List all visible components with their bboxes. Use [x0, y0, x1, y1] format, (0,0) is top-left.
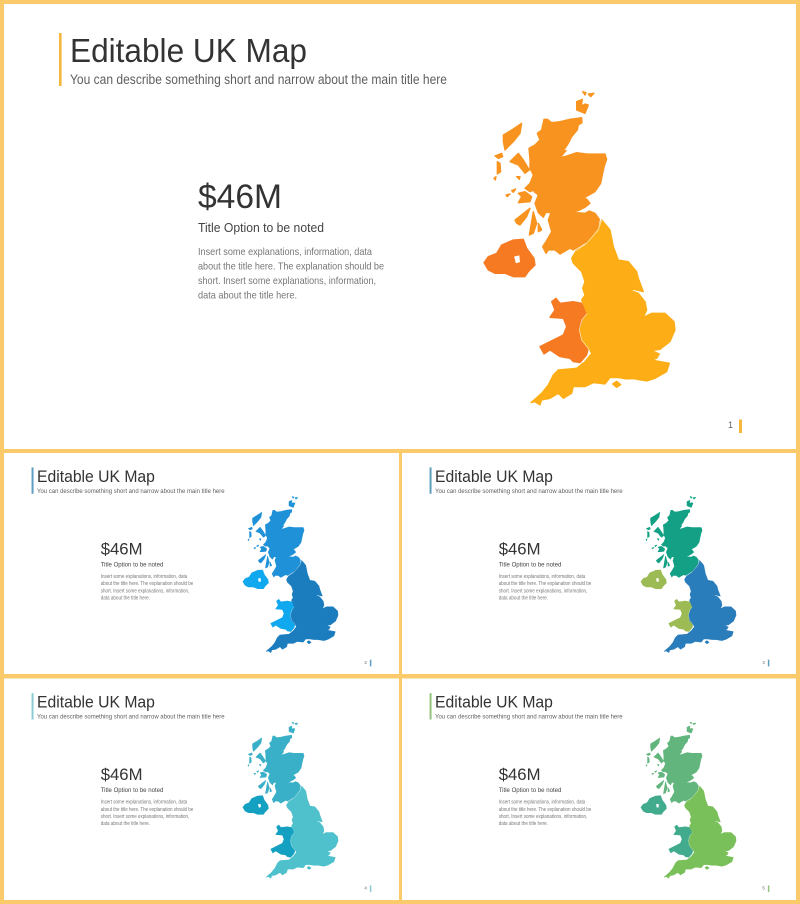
panel: slide 4 cyan: [4, 678, 399, 900]
page marker: [370, 660, 371, 666]
title accent bar: [32, 467, 34, 494]
option title: Title Option to be noted: [198, 221, 324, 235]
big number: $46M: [101, 765, 142, 784]
explanation text: about the title here. The explanation should be: [101, 807, 193, 813]
option title: Title Option to be noted: [499, 787, 562, 794]
title: Editable UK Map: [70, 32, 307, 69]
page number: 3: [762, 660, 765, 665]
explanation text: Insert some explanations, information, data: [101, 574, 187, 580]
panel: slide 2 blue: [4, 453, 399, 674]
explanation text: [101, 800, 193, 827]
big number: $46M: [499, 539, 540, 558]
big number: $46M: [499, 765, 540, 784]
page number: 2: [364, 660, 367, 665]
page marker: [768, 885, 769, 892]
subtitle: You can describe something short and narrow about the main title here: [70, 72, 447, 87]
explanation text: data about the title here.: [101, 821, 150, 827]
title accent bar: [59, 33, 62, 86]
explanation text: Insert some explanations, information, data: [499, 574, 585, 580]
explanation text: about the title here. The explanation should be: [101, 581, 193, 587]
title: Editable UK Map: [435, 694, 553, 712]
title accent bar: [430, 693, 432, 719]
option title: Title Option to be noted: [101, 787, 164, 794]
option title: Title Option to be noted: [101, 561, 164, 568]
big number: $46M: [198, 178, 282, 216]
UK map green: [641, 722, 736, 878]
option title: Title Option to be noted: [499, 561, 562, 568]
panel: slide 3 teal and blue: [402, 453, 796, 674]
explanation text: data about the title here.: [101, 596, 150, 602]
explanation text: about the title here. The explanation should be: [198, 260, 384, 272]
explanation text: Insert some explanations, information, data: [499, 800, 585, 806]
explanation text: data about the title here.: [499, 821, 548, 827]
page marker: [768, 660, 769, 666]
page number: 5: [762, 886, 765, 891]
explanation text: [101, 574, 193, 602]
explanation text: short. Insert some explanations, information,: [499, 588, 587, 594]
explanation text: data about the title here.: [198, 290, 297, 302]
title: Editable UK Map: [37, 694, 155, 712]
subtitle: You can describe something short and narrow about the main title here: [37, 713, 225, 720]
UK map teal and blue: [641, 497, 736, 652]
subtitle: You can describe something short and narrow about the main title here: [435, 713, 623, 720]
explanation text: Insert some explanations, information, data: [198, 246, 372, 258]
page marker: [739, 420, 742, 433]
title accent bar: [430, 467, 432, 494]
UK map blue: [243, 497, 338, 652]
panel: slide 5 green: [402, 678, 796, 900]
title accent bar: [32, 693, 34, 719]
UK map orange: [484, 92, 675, 405]
explanation text: about the title here. The explanation should be: [499, 581, 591, 587]
explanation text: short. Insert some explanations, information,: [101, 814, 189, 820]
page marker: [370, 885, 371, 892]
explanation text: Insert some explanations, information, data: [101, 800, 187, 806]
explanation text: about the title here. The explanation should be: [499, 807, 591, 813]
explanation text: [499, 574, 591, 602]
page number: 1: [728, 420, 733, 430]
explanation text: [198, 246, 384, 302]
explanation text: short. Insert some explanations, information,: [499, 814, 587, 820]
explanation text: short. Insert some explanations, information,: [198, 275, 376, 287]
page number: 4: [364, 886, 367, 891]
explanation text: [499, 800, 591, 827]
explanation text: short. Insert some explanations, information,: [101, 588, 189, 594]
subtitle: You can describe something short and narrow about the main title here: [37, 488, 225, 495]
subtitle: You can describe something short and narrow about the main title here: [435, 488, 623, 495]
UK map cyan: [243, 722, 338, 878]
title: Editable UK Map: [435, 468, 553, 486]
explanation text: data about the title here.: [499, 596, 548, 602]
big number: $46M: [101, 539, 142, 558]
title: Editable UK Map: [37, 468, 155, 486]
panel: slide 1 orange: [4, 4, 796, 449]
